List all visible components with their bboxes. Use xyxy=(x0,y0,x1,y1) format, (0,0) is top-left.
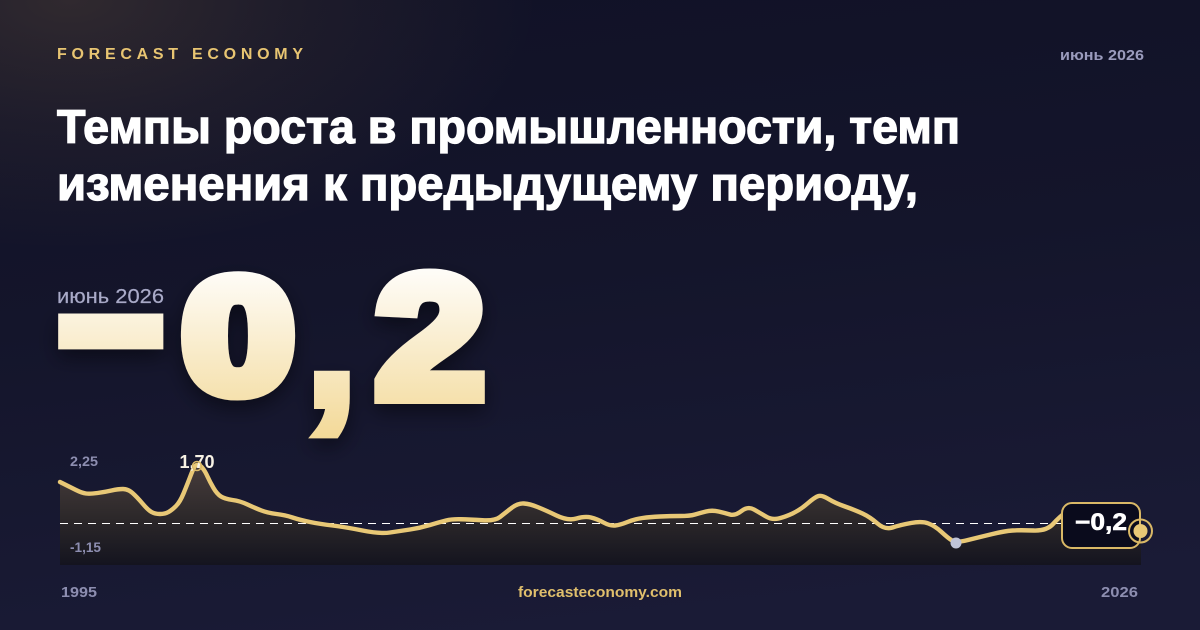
minimum marker xyxy=(950,538,962,548)
period label: июнь 2026 xyxy=(57,286,164,308)
title: Темпы роста в промышленности, темп xyxy=(57,100,960,153)
start year: 1995 xyxy=(61,584,97,601)
axis min label: -1,15 xyxy=(70,539,101,555)
big value xyxy=(57,217,485,445)
big value: 2 xyxy=(375,240,485,434)
zero baseline xyxy=(60,522,1141,524)
chart area fill xyxy=(60,465,1141,565)
title xyxy=(57,100,960,210)
peak marker xyxy=(192,462,202,470)
end year: 2026 xyxy=(1101,584,1138,601)
date top right: июнь 2026 xyxy=(1060,47,1144,64)
current value callout: −0,2 xyxy=(1075,509,1127,536)
big value: 0 xyxy=(183,247,293,426)
big value: − xyxy=(57,217,164,441)
title: изменения к предыдущему периоду, xyxy=(57,157,918,210)
current value marker xyxy=(1129,520,1152,542)
current value callout xyxy=(1062,503,1140,548)
chart xyxy=(60,452,1152,565)
source site: forecasteconomy.com xyxy=(518,584,682,601)
big value: , xyxy=(306,232,357,445)
data line xyxy=(60,465,1075,542)
axis max label: 2,25 xyxy=(70,453,98,469)
peak value label: 1,70 xyxy=(179,452,215,472)
brand label: FORECAST ECONOMY xyxy=(57,46,303,63)
